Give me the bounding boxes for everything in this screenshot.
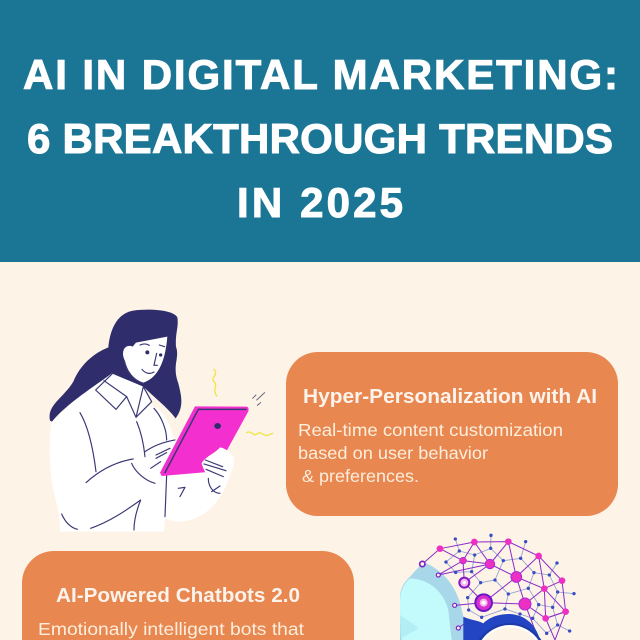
- card body text: [298, 420, 563, 486]
- blouse: [50, 367, 234, 532]
- tablet: [160, 406, 249, 476]
- head inner: [400, 578, 452, 640]
- card: chatbots: [22, 551, 354, 640]
- title: IN 2025: [237, 179, 403, 226]
- header banner: [0, 0, 640, 262]
- title: 6 BREAKTHROUGH TRENDS: [27, 115, 613, 162]
- title: AI IN DIGITAL MARKETING:: [23, 51, 618, 98]
- head outer: [400, 562, 465, 640]
- holding hand: [202, 447, 233, 485]
- spark lines: [253, 393, 265, 405]
- card: hyper-personalization: [286, 352, 618, 516]
- pink nodes: [437, 538, 569, 622]
- card body text: & preferences.: [302, 466, 419, 486]
- face details: [124, 344, 165, 383]
- hollow nodes: [420, 561, 460, 630]
- small blue nodes: [444, 534, 576, 635]
- pointing finger lines: [132, 440, 175, 483]
- hair: [50, 310, 181, 422]
- card body text: based on user behavior: [298, 443, 488, 463]
- yellow squiggles: [213, 369, 273, 435]
- neural edges purple: [422, 542, 566, 640]
- title: [23, 51, 618, 226]
- ring nodes: [459, 578, 492, 611]
- card heading: AI-Powered Chatbots 2.0: [56, 585, 300, 607]
- card body text: Real-time content customization: [298, 420, 563, 440]
- card heading: Hyper-Personalization with AI: [303, 386, 597, 408]
- face: [123, 337, 167, 383]
- blouse lines: [62, 373, 220, 530]
- head nose shade: [400, 615, 418, 638]
- illustration: AI neural brain head: [400, 534, 576, 640]
- neural edges light: [446, 535, 574, 633]
- card body text: Emotionally intelligent bots that: [38, 619, 304, 639]
- illustration: woman using a pink tablet: [50, 310, 273, 532]
- blue ring sensor: [463, 614, 541, 640]
